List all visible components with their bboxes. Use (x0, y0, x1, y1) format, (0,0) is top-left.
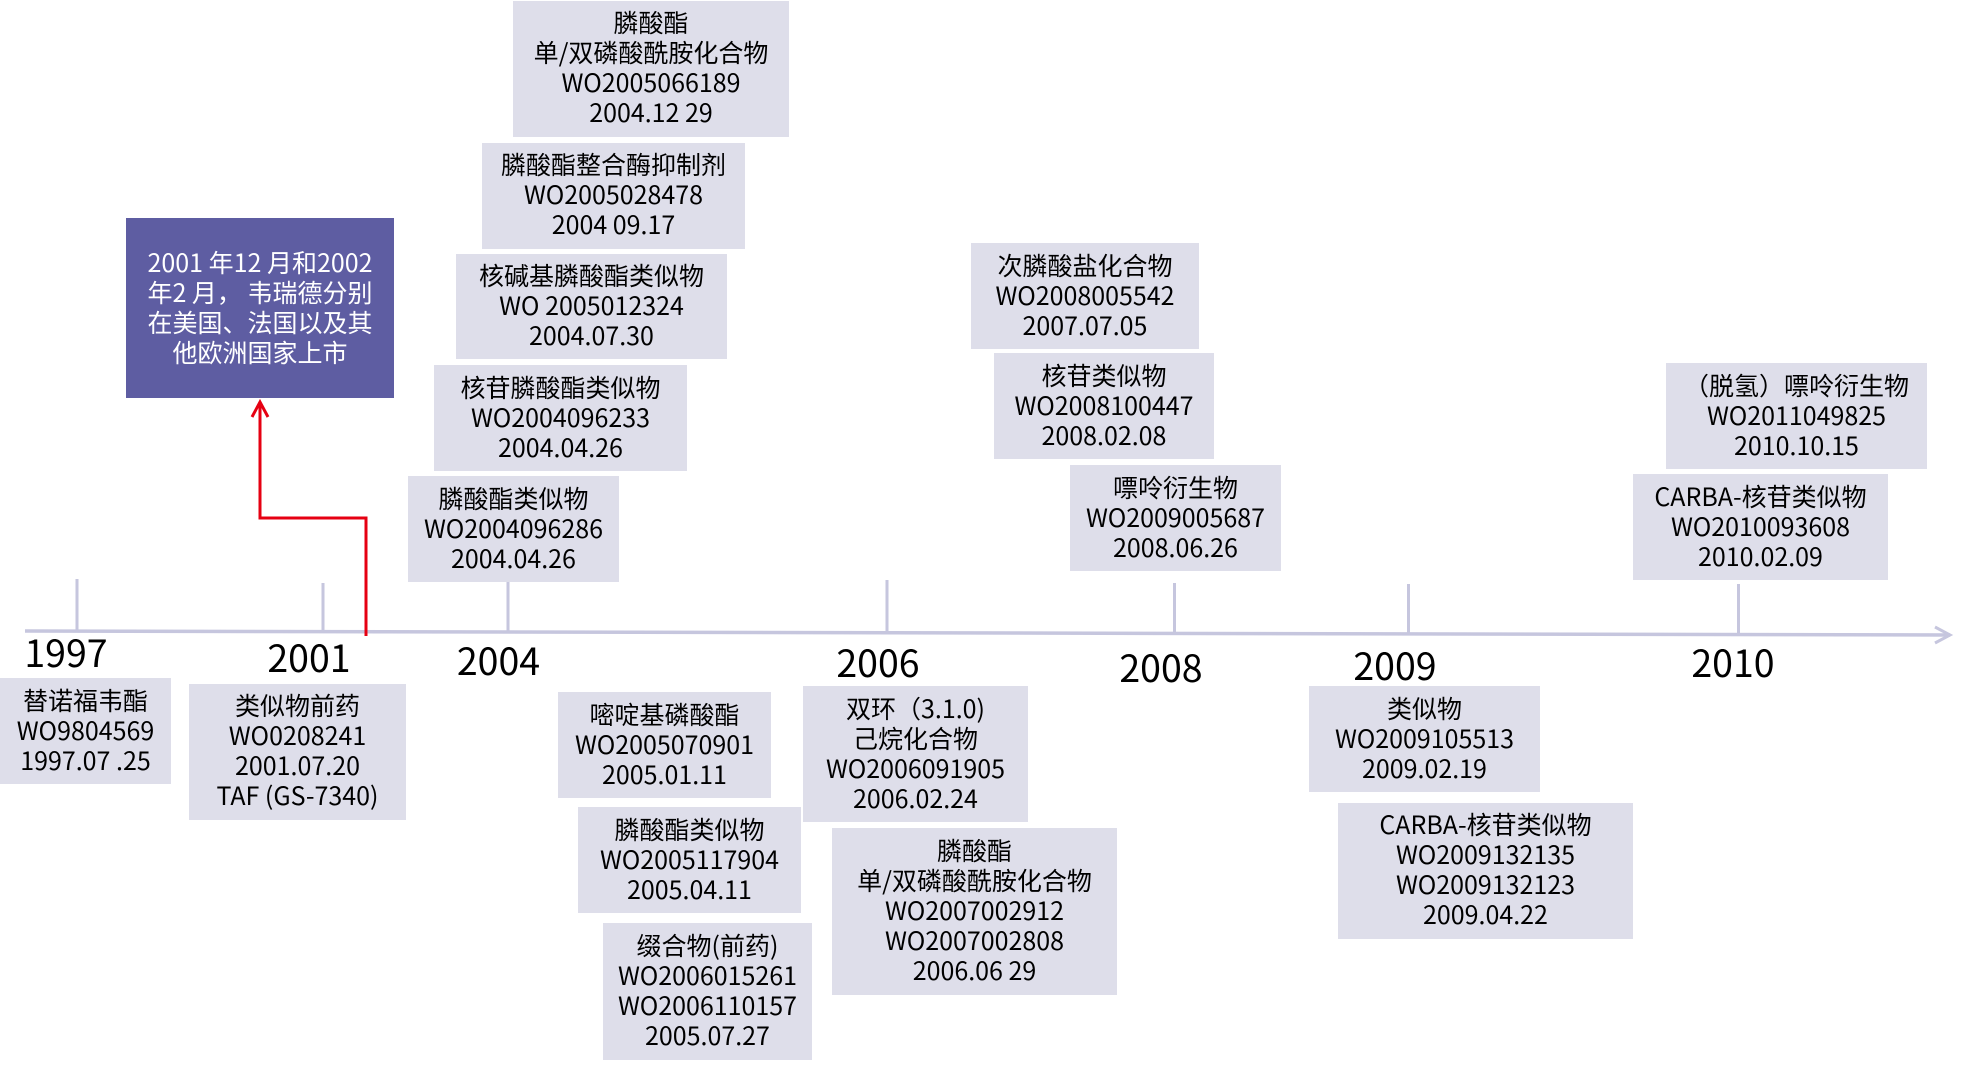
panel: 2007 hypophosphonate: 次膦酸盐化合物 (997, 246, 1172, 282)
panel: 2009 analog: 2009.02.19 (1362, 750, 1487, 786)
panel: 2001 analog prodrug (189, 684, 406, 820)
panel: 2009 CARBA nucleoside: WO2009132123 (1396, 866, 1575, 902)
panel: 2005 phosphonate analog: 2005.04.11 (627, 870, 752, 906)
panel: 2006 phosphonate mono/bisamidate: 膦酸酯 (937, 832, 1012, 868)
panel: 2006 bicyclo hexane: 双环（3.1.0) (846, 690, 985, 726)
panel: 2008 purine derivative: 2008.06.26 (1113, 528, 1238, 564)
panel: 2004 phosphonate analog: 2004.04.26 (451, 540, 576, 576)
panel: 2004 phosphate mono/bisamidate (513, 1, 789, 137)
panel: 2005 pyrimidine phosphonate: 2005.01.11 (602, 756, 727, 792)
panel: 2009 analog (1309, 686, 1540, 792)
panel: 1997 tenofovir ester: 1997.07 .25 (20, 742, 151, 778)
panel: 2005 phosphonate analog: 膦酸酯类似物 (614, 810, 764, 846)
panel: 2008 nucleoside analog: 核苷类似物 (1041, 356, 1166, 392)
year labels: 2010 (1691, 633, 1775, 688)
panel: 2006 phosphonate mono/bisamidate: WO2007002808 (885, 922, 1064, 958)
callout: market launch: 年2 月， 韦瑞德分别 (147, 274, 373, 310)
panel: 2009 analog: WO2009105513 (1335, 720, 1514, 756)
panel: 2001 analog prodrug: TAF (GS-7340) (216, 776, 379, 812)
panel: 2001 analog prodrug: WO0208241 (229, 716, 366, 752)
panel: 2004 phosphate mono/bisamidate: 2004.12 29 (589, 94, 713, 130)
year labels: 2006 (836, 633, 920, 688)
panel: 2004 phosphonate analog: WO2004096286 (424, 510, 603, 546)
year labels: 2004 (457, 631, 540, 686)
panel: 2004 nucleoside phosphonate: WO2004096233 (471, 398, 650, 434)
panel: 2004 nucleobase phosphonate: 核碱基膦酸酯类似物 (479, 257, 704, 293)
panel: 2007 hypophosphonate: WO2008005542 (995, 276, 1175, 312)
panel: 2001 analog prodrug: 2001.07.20 (235, 746, 360, 782)
panel: 2005 conjugate prodrug: 2005.07.27 (645, 1017, 770, 1053)
panel: 2005 pyrimidine phosphonate: 嘧啶基磷酸酯 (589, 696, 740, 732)
panel: 2010 deaza purine derivative: 2010.10.15 (1734, 426, 1859, 462)
panel: 2006 bicyclo hexane: 己烷化合物 (853, 720, 978, 756)
panel: 2004 phosphonate analog: 膦酸酯类似物 (438, 480, 588, 516)
panel: 2001 analog prodrug: 类似物前药 (235, 686, 360, 722)
panel: 1997 tenofovir ester (0, 678, 171, 784)
panel: 2010 CARBA nucleoside (1633, 474, 1888, 580)
panel: 2004 phosphonate analog (408, 476, 619, 582)
callout: market launch (126, 218, 394, 398)
panel: 2009 CARBA nucleoside: 2009.04.22 (1423, 896, 1548, 932)
panel: 2010 deaza purine derivative (1666, 363, 1927, 469)
panel: 2004 phosphate mono/bisamidate: 膦酸酯 (613, 4, 688, 40)
panel: 2008 nucleoside analog: WO2008100447 (1014, 386, 1194, 422)
year labels: 2001 (267, 628, 351, 683)
callout: market launch: 2001 年12 月和2002 (148, 244, 372, 280)
panel: 2004 integrase inhibitor: 膦酸酯整合酶抑制剂 (501, 146, 726, 182)
panel: 2004 integrase inhibitor: 2004 09.17 (552, 206, 675, 242)
panel: 2006 bicyclo hexane: WO2006091905 (826, 750, 1005, 786)
panel: 2007 hypophosphonate: 2007.07.05 (1023, 306, 1147, 342)
panel: 2004 phosphate mono/bisamidate: WO2005066189 (561, 64, 741, 100)
panel: 2005 pyrimidine phosphonate (558, 692, 771, 798)
panel: 2004 nucleobase phosphonate: 2004.07.30 (529, 317, 654, 353)
panel: 2005 pyrimidine phosphonate: WO2005070901 (575, 726, 754, 762)
panel: 2009 analog: 类似物 (1387, 690, 1462, 726)
panel: 2006 bicyclo hexane: 2006.02.24 (853, 780, 978, 816)
panel: 2006 phosphonate mono/bisamidate: WO2007002912 (885, 892, 1064, 928)
year labels: 1997 (24, 623, 108, 678)
year labels: 2009 (1353, 636, 1437, 691)
year labels (24, 623, 1775, 693)
panel: 2009 CARBA nucleoside (1338, 803, 1633, 939)
panel: 2005 phosphonate analog (578, 807, 801, 913)
panel: 2005 phosphonate analog: WO2005117904 (600, 840, 779, 876)
panel: 2008 purine derivative (1070, 465, 1281, 571)
panel: 2010 CARBA nucleoside: 2010.02.09 (1698, 538, 1823, 574)
panel: 2006 phosphonate mono/bisamidate: 单/双磷酸酰胺化合物 (857, 862, 1092, 898)
panel: 2004 integrase inhibitor: WO2005028478 (524, 176, 703, 212)
year labels: 2008 (1119, 638, 1203, 693)
panel: 2008 nucleoside analog (994, 353, 1214, 459)
panel: 2005 conjugate prodrug: 缀合物(前药) (637, 927, 778, 963)
year ticks (77, 579, 1738, 635)
panel: 2010 deaza purine derivative: （脱氢）嘌呤衍生物 (1684, 366, 1909, 402)
panel: 2004 phosphate mono/bisamidate: 单/双磷酸酰胺化合物 (534, 34, 768, 70)
panel: 2004 nucleoside phosphonate (434, 365, 687, 471)
panel: 2004 nucleobase phosphonate (456, 254, 727, 359)
panel: 2005 conjugate prodrug (603, 923, 812, 1060)
panel: 2005 conjugate prodrug: WO2006110157 (618, 987, 797, 1023)
panel: 2006 bicyclo hexane (803, 686, 1028, 822)
panel: 2004 nucleoside phosphonate: 核苷膦酸酯类似物 (460, 368, 660, 404)
panel: 2009 CARBA nucleoside: CARBA-核苷类似物 (1379, 806, 1592, 842)
panel: 2004 nucleobase phosphonate: WO 2005012324 (499, 287, 684, 323)
panel: 2009 CARBA nucleoside: WO2009132135 (1396, 836, 1575, 872)
panel: 2008 purine derivative: 嘌呤衍生物 (1113, 468, 1238, 504)
panel: 2008 purine derivative: WO2009005687 (1086, 498, 1265, 534)
panel: 2010 CARBA nucleoside: WO2010093608 (1671, 508, 1850, 544)
panel: 2005 conjugate prodrug: WO2006015261 (618, 957, 797, 993)
panel: 1997 tenofovir ester: WO9804569 (17, 712, 154, 748)
red arrow to market launch callout (252, 402, 366, 636)
panel: 2008 nucleoside analog: 2008.02.08 (1042, 416, 1166, 452)
panel: 2010 CARBA nucleoside: CARBA-核苷类似物 (1654, 478, 1867, 514)
panel: 2007 hypophosphonate (971, 243, 1199, 349)
panel: 2006 phosphonate mono/bisamidate (832, 828, 1117, 995)
panel: 2004 nucleoside phosphonate: 2004.04.26 (498, 428, 623, 464)
panel: 2004 integrase inhibitor (482, 143, 745, 249)
callout: market launch: 他欧洲国家上市 (172, 334, 348, 370)
panel: 2010 deaza purine derivative: WO2011049825 (1707, 396, 1886, 432)
panel: 1997 tenofovir ester: 替诺福韦酯 (23, 682, 148, 718)
horizontal axis arrow (25, 627, 1950, 643)
callout: market launch: 在美国、法国以及其 (147, 304, 372, 340)
panel: 2006 phosphonate mono/bisamidate: 2006.06 29 (913, 952, 1036, 988)
